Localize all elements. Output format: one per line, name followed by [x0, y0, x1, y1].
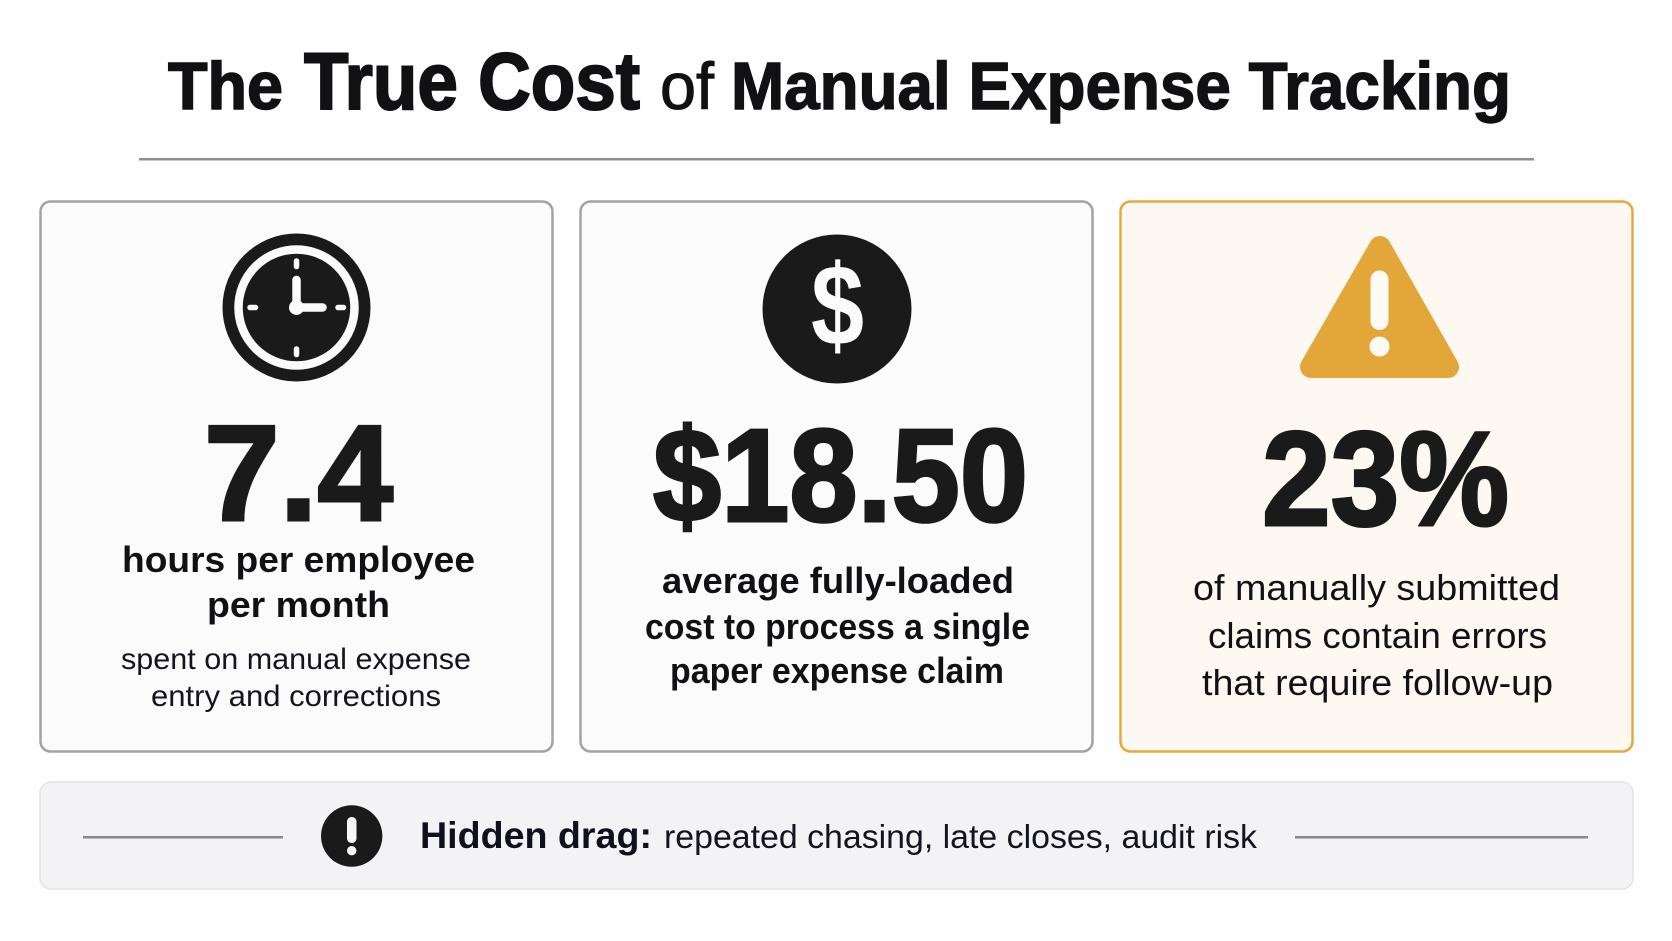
- banner text: Hidden drag:: [420, 815, 652, 856]
- label: average fully-loaded cost: average fully-loaded: [662, 560, 1014, 601]
- title: True Cost: [304, 37, 640, 127]
- icon: dollar coin: [762, 234, 912, 384]
- panel: processing cost: [580, 202, 1092, 752]
- description: manually submitted claims: that require follow-up: [1202, 662, 1553, 703]
- icon: clock: [222, 234, 370, 382]
- panel: hours per employee: [40, 202, 552, 752]
- icon: exclamation circle: [321, 805, 382, 867]
- icon: dollar coin: $: [811, 242, 864, 370]
- icon: warning triangle: [1311, 247, 1448, 367]
- banner text: [420, 815, 1258, 856]
- label: hours per employee per month: per month: [207, 584, 390, 625]
- label: average fully-loaded cost: cost to process a single: [645, 606, 1030, 647]
- stat: 23%: 23%: [1262, 405, 1509, 554]
- panel: error rate: [1120, 202, 1632, 752]
- label: hours per employee per month: hours per employee: [122, 539, 475, 580]
- label: average fully-loaded cost: [645, 560, 1030, 691]
- stat: $18.50: $18.50: [653, 402, 1028, 549]
- description: spent on manual expense: spent on manual expense: [121, 643, 471, 676]
- description: manually submitted claims: of manually submitted: [1193, 567, 1560, 608]
- description: manually submitted claims: claims contain errors: [1208, 615, 1547, 656]
- label: hours per employee per month: [122, 539, 475, 625]
- stat: 7.4: 7.4: [204, 397, 393, 549]
- title: [168, 37, 1511, 127]
- title: Manual Expense Tracking: [731, 49, 1511, 124]
- banner text: repeated chasing, late closes, audit risk: [664, 818, 1258, 855]
- label: average fully-loaded cost: paper expense claim: [670, 650, 1004, 691]
- description: spent on manual expense: [121, 643, 471, 713]
- description: spent on manual expense: entry and corrections: [151, 680, 441, 713]
- description: manually submitted claims: [1193, 567, 1560, 703]
- title: of: [660, 49, 715, 123]
- title: The: [168, 49, 283, 124]
- banner: hidden drag: [40, 782, 1633, 889]
